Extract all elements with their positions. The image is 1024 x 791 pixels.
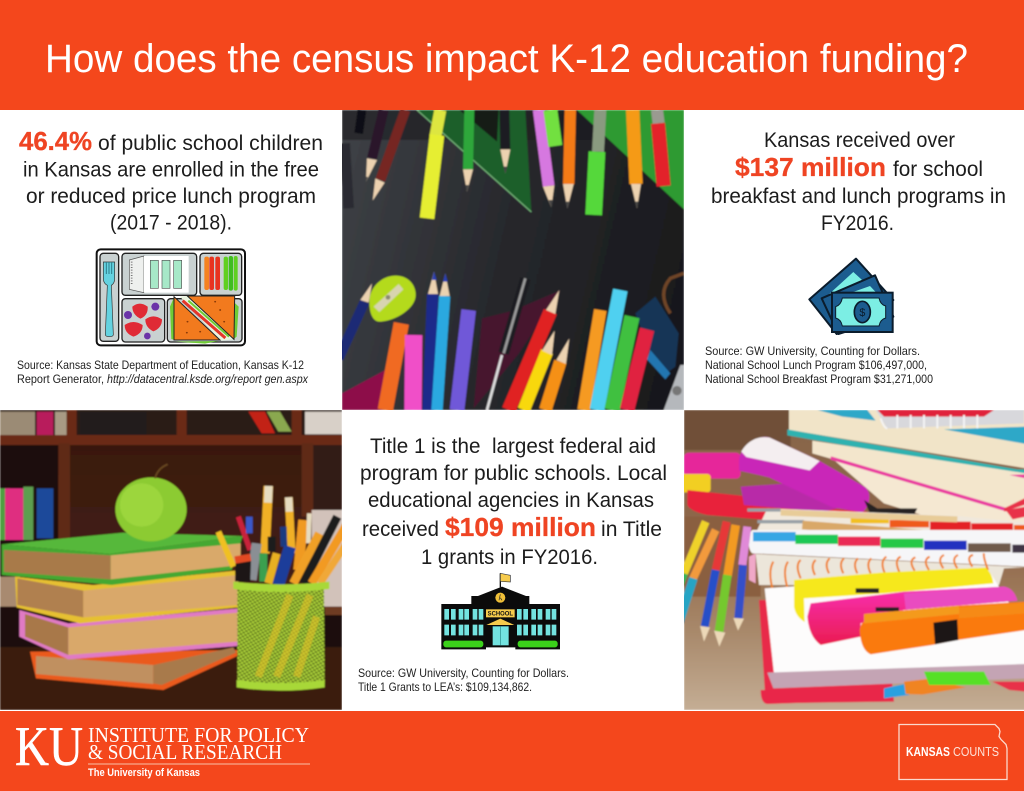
lunch statistic text: (2017 - 2018). — [110, 212, 232, 234]
Title 1 text: received — [362, 518, 439, 541]
lunch statistic text: in Kansas are enrolled in the free — [23, 158, 319, 182]
meal funding text: FY2016. — [821, 212, 894, 235]
meal funding text: Kansas received over — [764, 129, 955, 152]
photo: pencils and markers on chalkboard — [339, 110, 684, 410]
Title 1 text — [360, 435, 667, 569]
meal funding text: $137 million — [735, 152, 886, 182]
logo: KU Institute for Policy and Social Research: INSTITUTE FOR POLICY — [88, 723, 309, 747]
Title 1 text: in Title — [601, 518, 662, 541]
Title 1 text: program for public schools. Local — [360, 462, 667, 485]
panel: Title 1 grants statistic — [342, 410, 684, 711]
logo: Kansas Counts: COUNTS — [953, 745, 999, 759]
Title 1 text: educational agencies in Kansas — [368, 489, 654, 512]
logo: KU Institute for Policy and Social Research: & SOCIAL RESEARCH — [88, 740, 282, 764]
footer band — [0, 711, 1024, 791]
source note: lunch: http://datacentral.ksde.org/report gen.aspx — [107, 372, 309, 386]
lunch statistic text — [19, 126, 323, 234]
icon: stack of dollar bills: $ — [859, 307, 865, 319]
title: How does the census impact K-12 education funding? — [45, 37, 968, 81]
Title 1 text: Title 1 is the largest federal aid — [370, 435, 656, 458]
Title 1 text: $109 million — [445, 512, 596, 542]
lunch statistic text: 46.4% — [19, 126, 92, 156]
source note: meal programs: National School Breakfast Program $31,271,000 — [705, 372, 933, 386]
icon: school building: SCHOOL — [488, 611, 513, 618]
meal funding text: breakfast and lunch programs in — [711, 185, 1006, 208]
source note: Title 1: Title 1 Grants to LEA’s: $109,134,862. — [358, 680, 532, 694]
source note: meal programs — [705, 344, 933, 386]
logo: KU Institute for Policy and Social Research: KU — [15, 716, 83, 778]
meal funding text — [711, 129, 1006, 235]
header banner — [0, 0, 1024, 110]
source note: meal programs: National School Lunch Program $106,497,000, — [705, 358, 927, 372]
source note: Title 1 — [358, 666, 569, 694]
icon: school building — [441, 573, 560, 649]
icon: school lunch tray — [97, 249, 245, 345]
panel: school meal funding statistic — [684, 110, 1024, 410]
photo: school supplies with highlighters — [679, 410, 1024, 710]
logo: KU Institute for Policy and Social Research — [15, 716, 310, 779]
meal funding text: for school — [893, 158, 983, 181]
logo: Kansas Counts: KANSAS — [906, 745, 950, 759]
logo: Kansas Counts — [899, 724, 1007, 780]
icon: stack of dollar bills — [809, 259, 893, 334]
source note: meal programs: Source: GW University, Counting for Dollars. — [705, 344, 920, 358]
source note: lunch: Source: Kansas State Department of Education, Kansas K-12 — [17, 358, 304, 372]
lunch statistic text: or reduced price lunch program — [26, 185, 316, 208]
logo: KU Institute for Policy and Social Research: The University of Kansas — [88, 767, 200, 779]
photo: apple on books with pencil cup — [0, 410, 347, 710]
Title 1 text: 1 grants in FY2016. — [421, 546, 598, 569]
source note: Title 1: Source: GW University, Counting for Dollars. — [358, 666, 569, 680]
source note: lunch — [17, 358, 309, 386]
source note: lunch: Report Generator, — [17, 372, 104, 386]
lunch statistic text: of public school children — [98, 132, 323, 155]
panel: free or reduced lunch statistic — [0, 110, 342, 410]
